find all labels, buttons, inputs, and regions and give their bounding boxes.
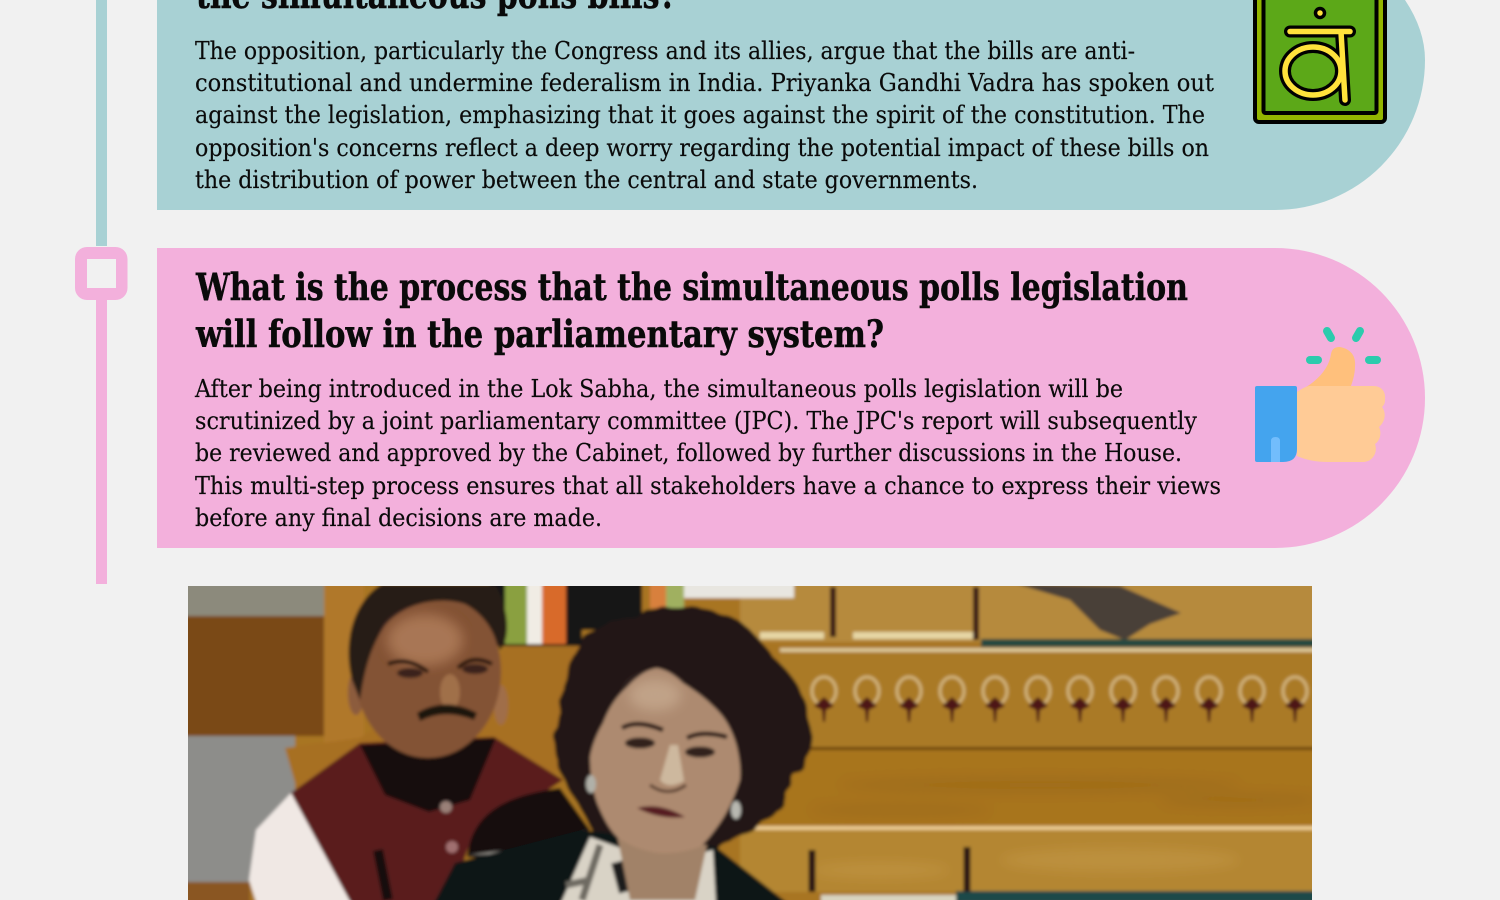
- photo: Priyanka Gandhi Vadra in the Lok Sabha: [180, 580, 1320, 900]
- text block: process panel: [194, 375, 1221, 532]
- wood grain: [810, 778, 1320, 815]
- text block: process panel: This multi-step process ensures that all stakeholders have a chance to express their views: [195, 472, 1221, 500]
- panel: parliamentary process: [157, 248, 1425, 548]
- text block: opposition panel: the distribution of power between the central and state governments.: [195, 166, 978, 194]
- icon: thumbs up: [1255, 331, 1385, 462]
- text block: opposition panel: The opposition, particularly the Congress and its allies, argue that the bills are anti-: [195, 37, 1135, 65]
- text block: process panel: be reviewed and approved by the Cabinet, followed by further discussions in the House.: [195, 439, 1182, 467]
- text block: opposition panel: [195, 37, 1214, 194]
- heading: process panel: will follow in the parliamentary system?: [195, 312, 884, 356]
- text block: process panel: before any final decisions are made.: [195, 504, 602, 532]
- text block: opposition panel: against the legislation, emphasizing that it goes against the spirit of the constitution. The: [195, 101, 1205, 129]
- icon: green Devanagari letter tile: [1255, 0, 1385, 122]
- left wall: [188, 586, 326, 619]
- man: [249, 793, 356, 900]
- flags: [490, 580, 582, 646]
- timeline: [75, 0, 128, 584]
- text block: process panel: scrutinized by a joint parliamentary committee (JPC). The JPC's report will subsequently: [195, 407, 1197, 435]
- bench top: [740, 580, 1320, 642]
- text block: opposition panel: opposition's concerns reflect a deep worry regarding the potential impact of these bills on: [195, 134, 1209, 162]
- hand: [1017, 584, 1181, 640]
- pegs: [833, 587, 976, 640]
- heading: process panel: What is the process that the simultaneous polls legislation: [195, 265, 1188, 309]
- heading: process panel: [195, 265, 1188, 356]
- lamps: [812, 677, 1307, 705]
- panel: opposition concerns: [157, 0, 1425, 210]
- text block: opposition panel: constitutional and undermine federalism in India. Priyanka Gandhi Vadra has spoken out: [195, 69, 1214, 97]
- timeline node: [75, 247, 128, 300]
- text block: process panel: After being introduced in the Lok Sabha, the simultaneous polls legislation will be: [194, 375, 1123, 403]
- woman: [467, 788, 590, 860]
